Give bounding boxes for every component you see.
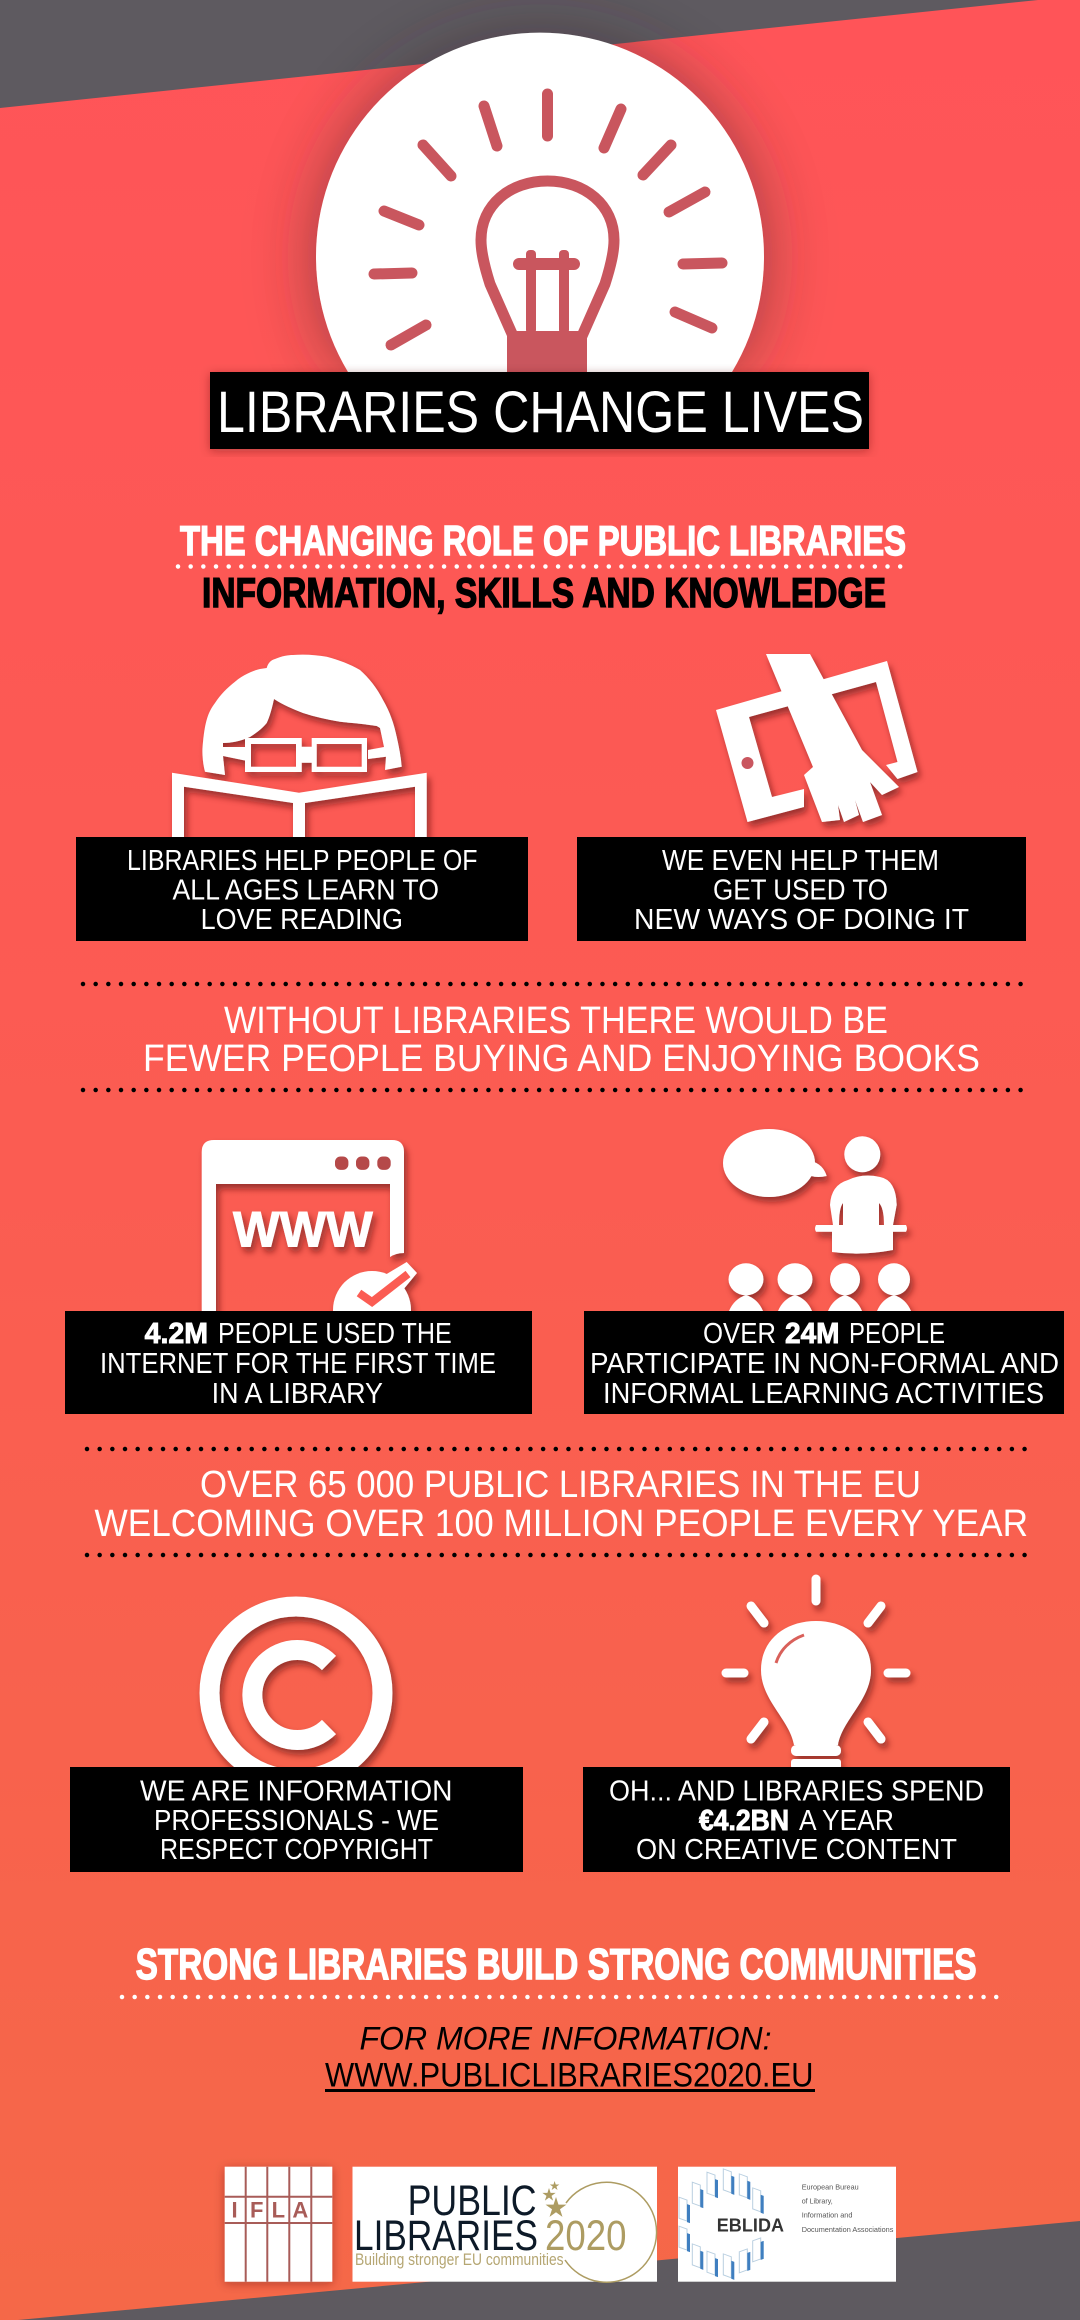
panel: new ways <box>577 654 1026 941</box>
logo: IFLA <box>225 2167 332 2282</box>
statement: without libraries: FEWER PEOPLE BUYING AND ENJOYING BOOKS <box>143 1038 980 1080</box>
caption: INFORMAL LEARNING ACTIVITIES <box>603 1378 1044 1410</box>
caption: OH... AND LIBRARIES SPEND <box>609 1776 984 1808</box>
caption: €4.2BN <box>699 1805 789 1837</box>
caption: ON CREATIVE CONTENT <box>636 1834 957 1866</box>
call to action: WWW.PUBLICLIBRARIES2020.EU <box>325 2057 814 2095</box>
panel: learning activities <box>584 1129 1064 1414</box>
caption: PEOPLE USED THE <box>218 1318 452 1350</box>
caption <box>70 1767 523 1872</box>
caption <box>76 837 528 941</box>
icon: shining bulb <box>726 1579 906 1769</box>
icon: check mark badge <box>333 1262 417 1349</box>
heading: information skills and knowledge: INFORMATION, SKILLS AND KNOWLEDGE <box>202 569 886 616</box>
statement: public libraries in the EU: OVER 65 000 PUBLIC LIBRARIES IN THE EU <box>200 1464 921 1506</box>
bottom grey wedge <box>18 2221 1080 2320</box>
caption: RESPECT COPYRIGHT <box>160 1834 433 1866</box>
icon: light bulb <box>481 181 614 372</box>
logo: EBLIDA <box>678 2167 896 2282</box>
caption: WE EVEN HELP THEM <box>662 845 939 877</box>
caption: LOVE READING <box>201 904 403 936</box>
logo: IFLA: A <box>292 2198 308 2222</box>
statement: public libraries in the EU: WELCOMING OVER 100 MILLION PEOPLE EVERY YEAR <box>94 1503 1028 1545</box>
caption: LIBRARIES HELP PEOPLE OF <box>127 845 478 877</box>
logo: IFLA: L <box>272 2198 285 2222</box>
icon: copyright symbol <box>210 1606 382 1780</box>
caption: PARTICIPATE IN NON-FORMAL AND <box>590 1348 1059 1380</box>
panel: creative content <box>583 1579 1010 1872</box>
logo: Public Libraries 2020: Building stronger EU communities <box>355 2250 564 2269</box>
icon: presenter and audience <box>723 1129 911 1311</box>
call to action <box>325 2020 815 2095</box>
panel: love reading <box>76 655 528 941</box>
panel: hero <box>316 33 764 372</box>
logo: EBLIDA: Documentation Associations <box>802 2225 894 2234</box>
caption: WE ARE INFORMATION <box>140 1776 452 1808</box>
caption: A YEAR <box>799 1805 894 1837</box>
caption: IN A LIBRARY <box>212 1378 383 1410</box>
statement: public libraries in the EU <box>94 1464 1028 1545</box>
icon: white sun disc <box>316 33 764 372</box>
panel: copyright <box>70 1606 523 1872</box>
logo: IFLA: F <box>250 2198 263 2222</box>
caption: INTERNET FOR THE FIRST TIME <box>100 1348 496 1380</box>
call to action: FOR MORE INFORMATION: <box>360 2020 772 2056</box>
logo: EBLIDA: EBLIDA <box>717 2216 784 2236</box>
caption <box>65 1311 532 1414</box>
top grey wedge <box>0 0 1038 108</box>
caption: NEW WAYS OF DOING IT <box>634 904 969 936</box>
caption: PROFESSIONALS - WE <box>154 1805 439 1837</box>
logo: Public Libraries 2020 <box>352 2167 657 2282</box>
icon: browser window: WWW <box>233 1202 373 1258</box>
logo: EBLIDA: Information and <box>802 2211 852 2220</box>
caption <box>584 1311 1064 1414</box>
icon: hand on tablet <box>716 654 918 822</box>
logo: Public Libraries 2020: PUBLIC <box>408 2177 537 2225</box>
logo: Public Libraries 2020: LIBRARIES <box>354 2212 538 2260</box>
caption: 4.2M <box>145 1318 208 1350</box>
caption <box>577 837 1026 941</box>
caption: OVER <box>703 1318 776 1350</box>
statement: without libraries: WITHOUT LIBRARIES THERE WOULD BE <box>224 1000 888 1042</box>
logo: EBLIDA: European Bureau <box>802 2182 859 2191</box>
caption: 24M <box>785 1318 840 1350</box>
logo: EBLIDA: of Library, <box>802 2197 833 2206</box>
caption <box>583 1767 1010 1872</box>
icon: light rays <box>374 94 722 345</box>
caption: ALL AGES LEARN TO <box>172 874 439 906</box>
icon: browser window <box>202 1140 404 1311</box>
statement: without libraries <box>143 1000 980 1080</box>
caption: PEOPLE <box>849 1318 945 1350</box>
title: LIBRARIES CHANGE LIVES <box>217 380 864 445</box>
logo: Public Libraries 2020: 2020 <box>545 2212 626 2260</box>
caption: GET USED TO <box>713 874 888 906</box>
icon: reader with glasses and book <box>172 655 427 837</box>
panel: internet <box>65 1140 532 1414</box>
logo: IFLA: I <box>231 2198 238 2222</box>
